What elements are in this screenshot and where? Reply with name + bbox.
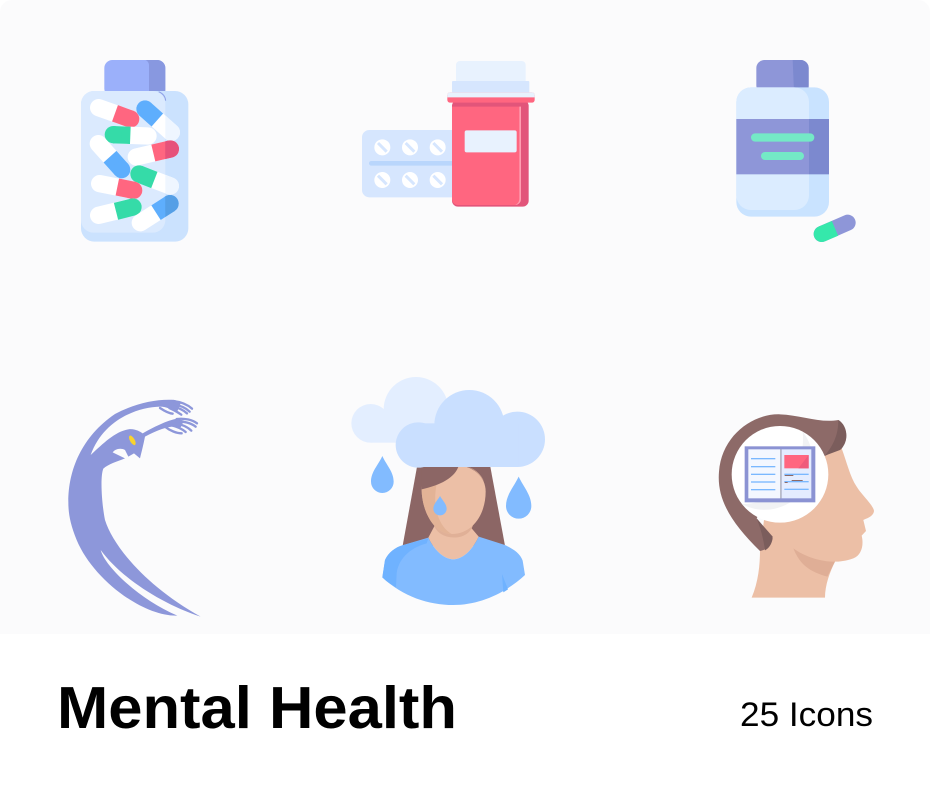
face	[422, 465, 486, 534]
capsule parts behind glass edge	[165, 116, 180, 217]
jaw shadow	[793, 548, 835, 577]
open book	[745, 446, 815, 502]
thought circle	[732, 426, 828, 523]
icon: blister pack and red pill bottle	[362, 61, 535, 207]
bottle label	[736, 119, 829, 174]
icon: anguished crescent figure	[68, 400, 201, 617]
title: Mental Health	[57, 675, 457, 741]
right rain drop	[506, 477, 531, 519]
front cloud	[396, 390, 545, 468]
bottle cap	[756, 60, 809, 93]
capsule	[814, 223, 848, 242]
red bottle	[452, 100, 529, 207]
teardrop	[433, 496, 447, 515]
left rain drop	[371, 456, 394, 493]
hair	[719, 414, 846, 551]
neck shadow	[433, 522, 473, 538]
hands and fingers	[160, 401, 197, 433]
yellow eye	[128, 435, 137, 446]
bottle body	[736, 87, 829, 217]
capsules	[98, 100, 179, 223]
back cloud	[351, 377, 448, 443]
hair fringe	[422, 465, 459, 489]
shirt	[382, 537, 525, 605]
icon: head in profile with open book	[719, 414, 874, 598]
icon: purple label bottle with capsule	[736, 60, 848, 242]
hair back	[403, 465, 505, 546]
icon: capsule bottle	[81, 60, 188, 242]
figure silhouette	[68, 400, 201, 617]
bottle cap	[104, 60, 165, 97]
face shade	[422, 484, 452, 534]
bottle body	[81, 91, 188, 242]
neck	[428, 517, 479, 559]
icon count: 25 Icons	[740, 696, 873, 734]
bottle lid	[447, 61, 535, 103]
blister pack	[362, 130, 462, 197]
icon: sad woman under rain cloud	[351, 377, 545, 605]
head skin	[752, 425, 874, 598]
